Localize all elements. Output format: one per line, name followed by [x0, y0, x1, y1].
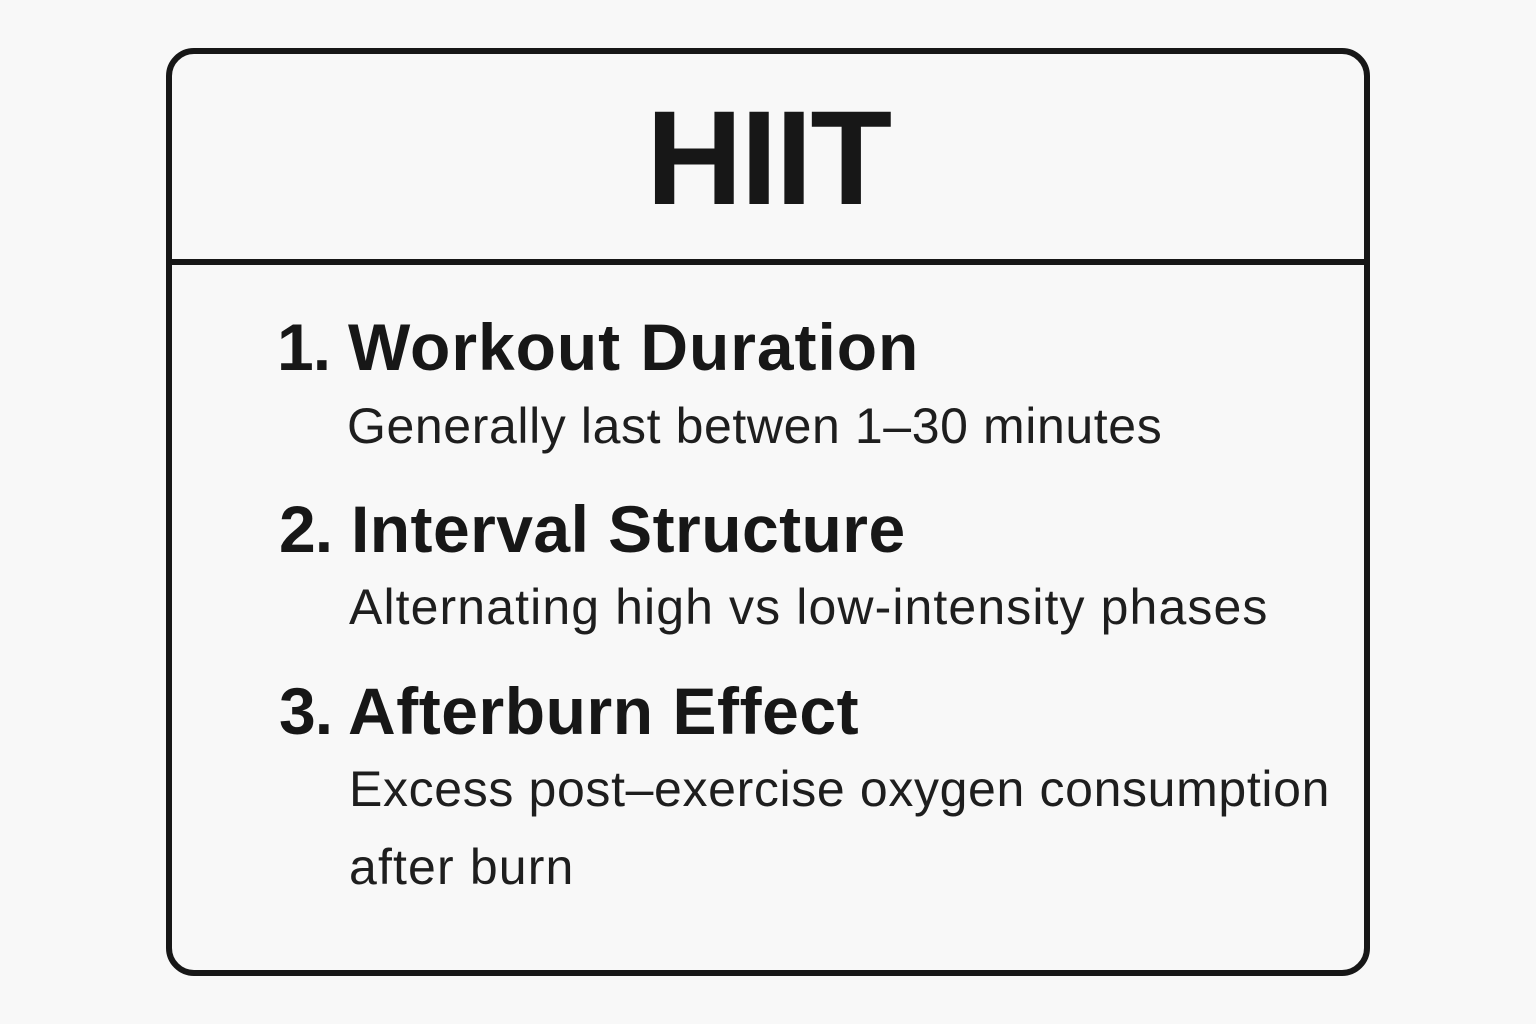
heading: afterburn effect: 3. [279, 674, 332, 748]
heading: interval structure: Interval Structure [351, 492, 906, 566]
text: afterburn description line 2: after burn [349, 839, 575, 895]
header divider [170, 259, 1366, 265]
title: HIIT [646, 84, 890, 233]
heading: afterburn effect: Afterburn Effect [348, 674, 859, 748]
text: interval structure description: Alternating high vs low-intensity phases [349, 579, 1268, 635]
heading: workout duration: Workout Duration [348, 310, 919, 384]
heading: workout duration: 1. [277, 310, 330, 384]
text: afterburn description line 1: Excess post–exercise oxygen consumption [349, 761, 1330, 817]
text: workout duration description: Generally last betwen 1–30 minutes [347, 398, 1162, 454]
heading: interval structure: 2. [279, 492, 332, 566]
panel: HIIT card [166, 48, 1370, 976]
